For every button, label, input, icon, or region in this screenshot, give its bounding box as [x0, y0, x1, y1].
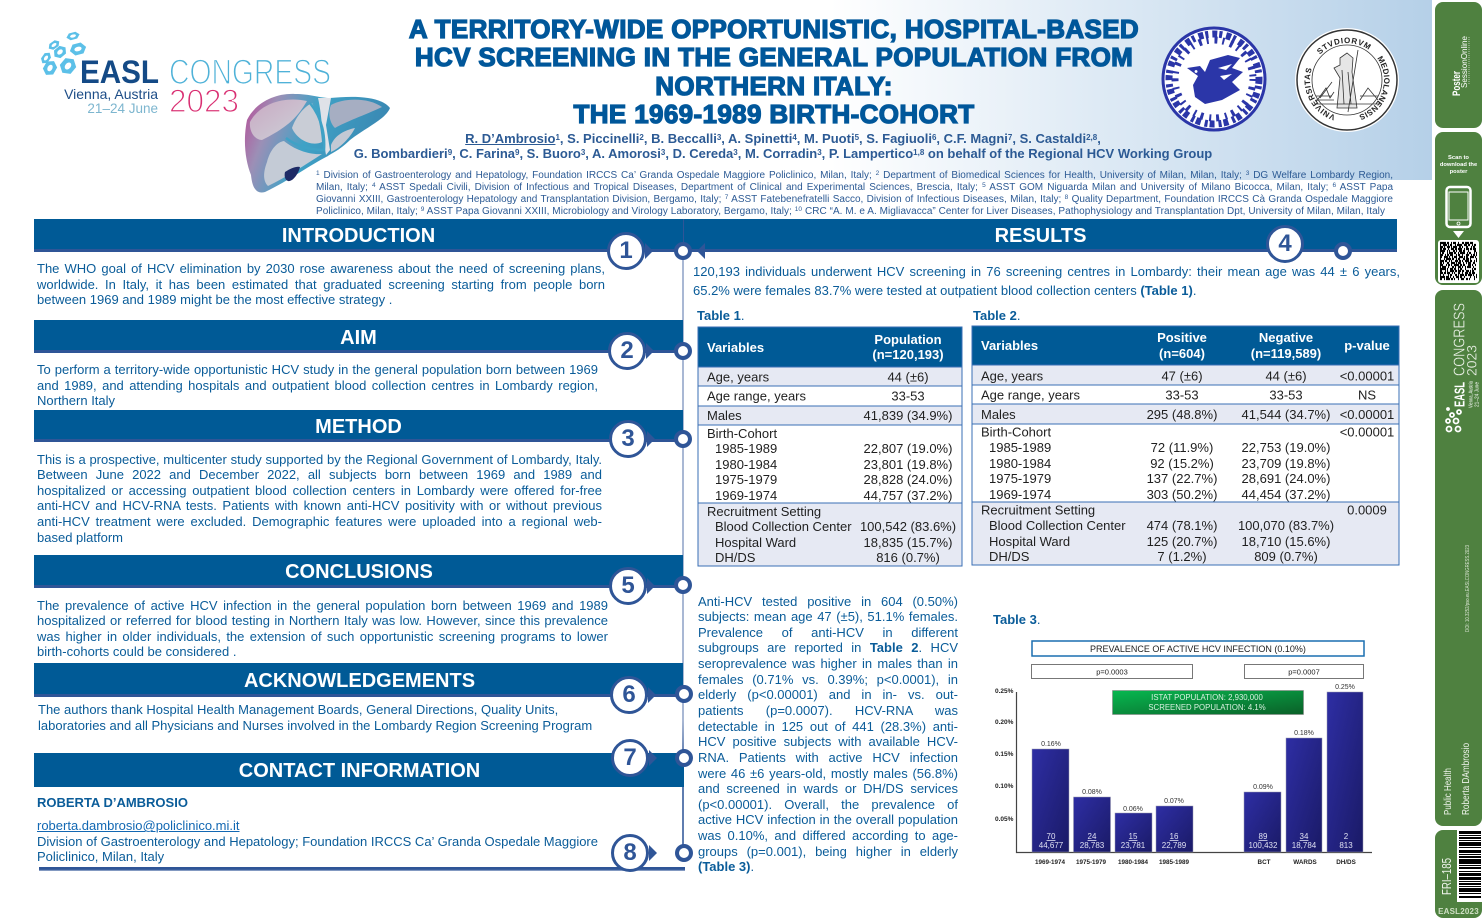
icon: University of Milan seal: VNIVERSITAS: [1304, 68, 1334, 120]
table 1: DH/DS: [715, 550, 756, 565]
heading: introduction: INTRODUCTION: [282, 225, 435, 247]
header gradient band: [0, 0, 1432, 180]
bar value labels: [1041, 684, 1355, 813]
bar value labels: 0.18%: [1294, 730, 1314, 737]
in-bar counts: [1039, 832, 1353, 850]
sidebar panel: QR download: [1435, 132, 1482, 285]
chart title box: [1032, 641, 1364, 656]
text: anti-HCV results: (Table 3).: [698, 859, 754, 874]
barcode: [1457, 830, 1482, 902]
text: method: hospitalized or accessing outpatient blood collection centers in Lombardy were offered for-free: [37, 483, 602, 498]
bar chart: prevalence of active HCV infection: [995, 640, 1372, 866]
callout: screened population: ISTAT POPULATION: 2,930,000: [1151, 693, 1263, 702]
text: introduction: worldwide. In Italy, it has been estimated that graduated screening starting from people born: [37, 277, 605, 292]
affiliations: Giovanni XXIII, Gastroenterology Hepatology and Transplantation Division, Bergamo, Italy; 7 ASST Fatebenefratelli Sacco, Division of Infectious Diseases, Milan, Italy; 8 Quality Department, Foundation IRCCS Cà Granda Ospedale Maggiore: [316, 194, 1393, 205]
category labels: 1980-1984: [1118, 859, 1149, 866]
badge 7: 7: [623, 744, 637, 771]
y axis labels: 0.25%: [995, 688, 1014, 695]
table 2: 22,753 (19.0%): [1242, 440, 1330, 455]
table 3 caption: Table 3.: [993, 612, 1040, 627]
badge 2: 2: [620, 337, 634, 364]
text: anti-HCV results: detectable in 125 out of 441 (28.3%) anti-: [698, 719, 958, 734]
text: anti-HCV results: was 0.10%, and differed according to age-: [698, 828, 958, 843]
heading: method: [34, 410, 683, 442]
poster session wordmark: SessionOnline: [1459, 36, 1469, 88]
badge 1: 1: [619, 237, 633, 264]
badge 6: [610, 676, 648, 714]
category labels: 1975-1979: [1076, 859, 1107, 866]
text: method: based platform: [37, 530, 123, 545]
bar value labels: 0.07%: [1164, 798, 1184, 805]
sidebar congress location: Vienna, Austria: [1468, 380, 1474, 408]
badge 1: [607, 232, 645, 270]
node 6: [675, 685, 693, 703]
text: anti-HCV results: groups (p=0.001), being higher in elderly: [698, 844, 958, 859]
table 1: 816 (0.7%): [876, 550, 940, 565]
in-bar counts: 15: [1129, 832, 1138, 841]
table 2: Males: [981, 407, 1016, 422]
table 2: 809 (0.7%): [1254, 549, 1318, 564]
in-bar counts: 24: [1088, 832, 1097, 841]
topic: Public Health: [1442, 768, 1454, 815]
table 1: 100,542 (83.6%): [860, 519, 956, 534]
arrow: method connector: [647, 431, 655, 447]
in-bar counts: 28,783: [1080, 841, 1105, 850]
text: contact details: Policlinico, Milan, Italy: [37, 849, 164, 864]
heading: introduction: [34, 219, 683, 252]
EASL Congress logo: 21–24 June: [87, 101, 158, 116]
text: method: [37, 452, 602, 545]
table 1: 41,839 (34.9%): [864, 408, 952, 423]
sidebar congress location: 21–24 June: [1474, 382, 1480, 407]
arrow: bottom connector: [649, 845, 657, 861]
table 2: 7 (1.2%): [1157, 549, 1207, 564]
poster session wordmark: [1451, 36, 1469, 96]
badge 3: 3: [621, 425, 635, 452]
table 2: 1969-1974: [989, 487, 1051, 502]
event tag: EASL2023: [1438, 907, 1479, 916]
scan caption: [1440, 155, 1477, 175]
node results: [1334, 242, 1352, 260]
text: anti-HCV results: [698, 594, 958, 874]
table 1: 23,801 (19.8%): [864, 457, 952, 472]
table 2: 137 (22.7%): [1147, 471, 1217, 486]
table 2: 18,710 (15.6%): [1242, 534, 1330, 549]
table 2: NS: [1358, 388, 1376, 402]
table 2: Blood Collection Center: [989, 518, 1126, 533]
table 1: Age, years: [707, 370, 770, 384]
affiliations: 1 Division of Gastroenterology and Hepatology, Foundation IRCCS Ca’ Granda Ospedale Maggiore Policlinico, Milan, Italy; 2 Department of Biomedical Sciences for Health, University of Milan, Milan, Italy; 3 DG Welfare Lombardy Region,: [316, 170, 1393, 181]
heading: contact information: [34, 753, 684, 787]
sidebar panel: congress and poster details: [1435, 290, 1482, 826]
EASL Congress logo: Vienna, Austria: [64, 86, 158, 102]
affiliations: [316, 170, 1394, 217]
icon: university hospital seal: [1162, 26, 1266, 132]
text: introduction: [37, 261, 605, 307]
heading: method: METHOD: [315, 416, 402, 438]
table 1: Blood Collection Center: [715, 519, 852, 534]
category labels: BCT: [1258, 859, 1271, 866]
poster session wordmark: Poster: [1451, 70, 1463, 96]
table 2: 0.0009: [1347, 502, 1387, 518]
text: contact details: ROBERTA D’AMBROSIO: [37, 795, 188, 810]
heading: aim: AIM: [340, 327, 377, 349]
vertical timeline line: [682, 251, 684, 853]
category labels: WARDS: [1293, 859, 1317, 866]
table 1: 22,807 (19.0%): [864, 441, 952, 456]
table 2: <0.00001: [1340, 424, 1394, 440]
in-bar counts: 34: [1300, 832, 1309, 841]
EASL Congress logo: [41, 32, 331, 119]
text: anti-HCV results: HCV positive subjects with available HCV-: [698, 734, 958, 749]
title: A TERRITORY-WIDE OPPORTUNISTIC, HOSPITAL-BASED: [409, 14, 1139, 44]
text: method: anti-HCV and HCV-RNA tests. Patients with known anti-HCV positivity with or without previous: [37, 498, 602, 513]
table 2: DH/DS: [989, 549, 1030, 564]
table 2: 33-53: [1269, 388, 1303, 402]
table 2: 1985-1989: [989, 440, 1051, 455]
text: anti-HCV results: Prevalence of anti-HCV in different: [698, 625, 958, 640]
table 1: 33-53: [891, 388, 925, 404]
text: conclusions: hospitalized or referred for blood testing in Northern Italy was low. However, since this prevalence: [37, 613, 608, 628]
icon: hexagon cluster: [39, 31, 88, 78]
sidebar EASL wordmark: EASL: [1452, 382, 1468, 407]
text: conclusions: was higher in older individuals, the extension of such opportunistic screening programs to lower: [37, 629, 608, 644]
icon: sidebar hexagons: [1446, 408, 1461, 432]
p-value box: settings: p=0.0007: [1288, 668, 1320, 676]
badge 5: [609, 567, 647, 605]
icon: phone: [1445, 186, 1472, 238]
affiliations: Policlinico, Milan, Italy; 9 ASST Papa Giovanni XXIII, Microbiology and Virology Laboratory, Bergamo, Italy; 10 CRC “A. M. e A. Migliavacca” Center for Liver Diseases, Pathophysiology and Transplantation Dpt, University of Milan, Milan, Italy: [316, 206, 1385, 217]
table 2: 41,544 (34.7%): [1242, 407, 1330, 422]
text: anti-HCV results: RNA. Patients with active HCV infection: [698, 750, 958, 765]
table 1: 1969-1974: [715, 488, 777, 503]
table 2: Variables: [981, 338, 1038, 353]
table 2: 125 (20.7%): [1147, 534, 1217, 549]
text: results summary: [693, 264, 1400, 298]
table 2: 474 (78.1%): [1147, 518, 1217, 533]
arrow: aim connector: [646, 343, 653, 359]
callout: screened population: [1112, 690, 1304, 714]
table 1: 44,757 (37.2%): [864, 488, 952, 503]
heading: conclusions: [34, 555, 683, 588]
heading: aim: [34, 320, 683, 353]
affiliations: Milan, Italy; 4 ASST Spedali Civili, Division of Infectious and Tropical Diseases, Department of Clinical and Experimental Sciences, Brescia, Italy; 5 ASST GOM Niguarda Milan and University of Milano Bicocca, Milan, Italy; 6 ASST Papa: [316, 182, 1393, 193]
text: anti-HCV results: elderly (p<0.00001) and in in- vs. out-: [698, 687, 958, 702]
arrow connectors: [645, 243, 705, 259]
badge 4: [1266, 225, 1304, 263]
table 2: 47 (±6): [1161, 368, 1203, 384]
bar value labels: 0.25%: [1335, 684, 1355, 691]
logo wordmark: EASL: [80, 54, 159, 90]
node 1: [674, 242, 692, 260]
sidebar congress year: 2023: [1464, 345, 1480, 376]
author name: Roberta DAmbrosio: [1460, 743, 1472, 815]
in-bar counts: 2: [1344, 832, 1349, 841]
bar value labels: 0.16%: [1041, 741, 1061, 748]
table 2: Positive: [1157, 330, 1207, 345]
table 2: Age, years: [981, 368, 1044, 384]
table 1: 18,835 (15.7%): [864, 535, 952, 550]
arrow: acknowledgements connector: [648, 687, 655, 703]
heading: acknowledgements: ACKNOWLEDGEMENTS: [244, 670, 475, 692]
in-bar counts: 16: [1170, 832, 1179, 841]
table 1: Males: [707, 408, 742, 423]
table 2: Birth-Cohort: [981, 424, 1051, 440]
y axis labels: [995, 688, 1014, 823]
text: aim: and 1989, and attending hospitals and outpatient blood collection centres in Lombardy region,: [37, 378, 598, 393]
text: method: This is a prospective, multicenter study supported by the Regional Government of Lombardy, Italy.: [37, 452, 602, 466]
arrow: conclusions connector: [647, 578, 654, 594]
authors: [354, 131, 1212, 161]
bars: [1032, 692, 1363, 852]
icon: University of Milan seal: [1295, 28, 1399, 132]
text: anti-HCV results: patients (p=0.0007). HCV-RNA was: [698, 703, 958, 718]
badge 3: [609, 420, 647, 458]
category labels: [1035, 859, 1356, 866]
text: anti-HCV results: were 46 ±6 years-old, mostly males (56.8%): [698, 766, 958, 781]
text: conclusions: [37, 598, 608, 659]
table 2: Recruitment Setting: [981, 502, 1095, 518]
table 2: 44,454 (37.2%): [1242, 487, 1330, 502]
text: contact details: [37, 795, 598, 864]
table 2: 23,709 (19.8%): [1242, 456, 1330, 471]
sidebar congress location: [1468, 380, 1480, 408]
chart title box: PREVALENCE OF ACTIVE HCV INFECTION (0.10%): [1090, 644, 1306, 654]
node 7: [675, 749, 693, 767]
node 3: [674, 430, 692, 448]
title: HCV SCREENING IN THE GENERAL POPULATION FROM: [415, 42, 1133, 72]
text: method: anti-HCV treatment were excluded. Demographic features were uploaded into a regional web-: [37, 514, 602, 529]
scan caption: Scan to: [1448, 155, 1469, 161]
p-value box: birth cohorts: [1032, 664, 1192, 678]
bottom rule: [39, 867, 685, 871]
table 2: 92 (15.2%): [1150, 456, 1214, 471]
category labels: DH/DS: [1336, 859, 1356, 866]
EASL Congress logo: 2023: [169, 83, 239, 119]
DOI: DOI: 10.3252/pso.eu.EASLCONGRESS.2023: [1465, 545, 1471, 632]
text: anti-HCV results: Anti-HCV tested positive in 604 (0.50%): [698, 594, 958, 608]
category labels: 1969-1974: [1035, 859, 1066, 866]
text: acknowledgements: [38, 702, 592, 733]
in-bar counts: 70: [1047, 832, 1056, 841]
table 1: Age range, years: [707, 388, 807, 404]
table 1: Variables: [707, 340, 764, 355]
y axis labels: 0.15%: [995, 751, 1014, 758]
table 2: 303 (50.2%): [1147, 487, 1217, 502]
heading: results: RESULTS: [995, 225, 1086, 247]
title: [408, 14, 1139, 129]
scan caption: download the: [1440, 162, 1477, 168]
table 1: Birth-Cohort: [707, 426, 777, 441]
in-bar counts: 23,781: [1121, 841, 1146, 850]
text: method: Between June 2022 and December 2022, all subjects born between 1969 and 1989 and: [37, 467, 602, 482]
text: anti-HCV results: subgroups are reported in Table 2. HCV: [698, 640, 958, 655]
title: THE 1969-1989 BIRTH-COHORT: [574, 99, 974, 129]
heading: contact information: CONTACT INFORMATION: [239, 760, 480, 782]
sidebar panel: poster session online: [1435, 2, 1482, 128]
in-bar counts: 44,677: [1039, 841, 1064, 850]
y axis labels: 0.10%: [995, 783, 1014, 790]
authors: G. Bombardieri9, C. Farina9, S. Buoro3, A. Amorosi3, D. Cereda3, M. Corradin3, P. Lampertico1,8 on behalf of the Regional HCV Working Group: [354, 146, 1212, 161]
text: aim: Northern Italy: [37, 393, 115, 408]
text: introduction: between 1969 and 1989 might be the most effective strategy .: [37, 292, 392, 307]
table 1: Hospital Ward: [715, 535, 796, 550]
chart axes: [1016, 692, 1372, 852]
table 1: 1985-1989: [715, 441, 777, 456]
table 2: 72 (11.9%): [1151, 440, 1213, 455]
text: aim: [37, 362, 598, 408]
table 1: 28,828 (24.0%): [864, 472, 952, 487]
table 2: 1980-1984: [989, 456, 1051, 471]
icon: liver illustration: [244, 94, 390, 192]
bar value labels: 0.08%: [1082, 789, 1102, 796]
table 1: 1975-1979: [715, 472, 777, 487]
p-value box: birth cohorts: p=0.0003: [1096, 668, 1128, 676]
badge 7: [611, 739, 649, 777]
category labels: 1985-1989: [1159, 859, 1190, 866]
bar value labels: 0.09%: [1253, 784, 1273, 791]
badge 8: 8: [623, 839, 637, 866]
table 2: p-value: [1344, 338, 1390, 353]
table 1: 44 (±6): [887, 370, 929, 384]
p-value box: settings: [1244, 664, 1364, 678]
icon: University of Milan seal: STVDIORVM: [1317, 38, 1371, 54]
text: anti-HCV results: subjects: mean age 47 (±5), 51.1% females.: [698, 609, 958, 624]
table 2: Hospital Ward: [989, 534, 1070, 549]
node 2: [674, 342, 692, 360]
table 1: Recruitment Setting: [707, 504, 821, 519]
table 2: 33-53: [1165, 388, 1199, 402]
table 2: 295 (48.8%): [1147, 407, 1217, 422]
text: acknowledgements: laboratories and all Physicians and Nurses involved in the Lombardy Region Screening Program: [38, 718, 592, 733]
text: conclusions: The prevalence of active HCV infection in the general population born between 1969 and 1989: [37, 598, 608, 612]
in-bar counts: 89: [1259, 832, 1268, 841]
text: anti-HCV results: seroprevalence was higher in males than in: [698, 656, 958, 671]
node 8: [675, 844, 693, 862]
arrow: contact connector: [649, 750, 657, 766]
text: anti-HCV results: and screened in wards or DH/DS services: [698, 781, 958, 796]
table 2: [972, 326, 1400, 566]
text: introduction: The WHO goal of HCV elimination by 2030 rose awareness about the need of screening plans,: [37, 261, 605, 276]
badge 6: 6: [622, 681, 636, 708]
table 1 caption: Table 1.: [697, 308, 744, 323]
table 2: 28,691 (24.0%): [1242, 471, 1330, 486]
heading: acknowledgements: [34, 663, 683, 697]
icon: University of Milan seal: MEDIOLANENSIS: [1360, 56, 1390, 120]
sidebar panel: poster number and barcode: [1435, 830, 1482, 918]
table 2: (n=119,589): [1251, 346, 1321, 361]
badge 4: 4: [1278, 230, 1292, 257]
in-bar counts: 22,789: [1162, 841, 1187, 850]
poster number: FRI–185: [1440, 858, 1454, 895]
table 2: Negative: [1259, 330, 1313, 345]
badge 5: 5: [621, 572, 635, 599]
table 2: Age range, years: [981, 388, 1081, 402]
text: contact details: roberta.dambrosio@policlinico.mi.it: [37, 818, 240, 833]
text: conclusions: birth-cohorts could be considered .: [37, 644, 236, 659]
node 5: [674, 576, 692, 594]
text: acknowledgements: The authors thank Hospital Health Management Boards, General Directions, Quality Units,: [38, 702, 558, 717]
text: anti-HCV results: females (0.71% vs. 0.39%; p<0.0001), in: [698, 672, 958, 687]
table 1: 1980-1984: [715, 457, 777, 472]
text: results summary: 65.2% were females 83.7% were tested at outpatient blood collection centers (Table 1).: [693, 283, 1196, 298]
heading: results: [683, 219, 1397, 252]
QR code: [1438, 240, 1479, 283]
title: NORTHERN ITALY:: [655, 71, 893, 101]
table 2: <0.00001: [1340, 368, 1394, 384]
table 1: [698, 326, 962, 566]
authors: R. D’Ambrosio1, S. Piccinelli2, B. Beccalli3, A. Spinetti4, M. Puoti5, S. Fagiuoli6, C.F. Magni7, S. Castaldi2,8,: [465, 131, 1101, 146]
in-bar counts: 18,784: [1292, 841, 1317, 850]
text: anti-HCV results: (p<0.00001). Overall, the prevalence of: [698, 797, 958, 812]
badge 8: [611, 834, 649, 872]
table 2: <0.00001: [1340, 407, 1394, 422]
bar value labels: 0.06%: [1123, 806, 1143, 813]
table 1: (n=120,193): [872, 347, 944, 362]
text: aim: To perform a territory-wide opportunistic HCV study in the general population born between 1969: [37, 362, 598, 377]
y axis labels: 0.05%: [995, 816, 1014, 823]
table 2: 100,070 (83.7%): [1238, 518, 1334, 533]
callout: screened population: SCREENED POPULATION: 4.1%: [1148, 703, 1266, 712]
heading: conclusions: CONCLUSIONS: [285, 561, 433, 583]
in-bar counts: 100,432: [1249, 841, 1278, 850]
text: anti-HCV results: active HCV infection in the overall population: [698, 812, 958, 827]
badge 2: [608, 332, 646, 370]
scan caption: poster: [1450, 169, 1467, 175]
table 2 caption: Table 2.: [973, 308, 1020, 323]
table 1: Population: [874, 332, 942, 347]
table 2: 44 (±6): [1265, 368, 1307, 384]
text: contact details: Division of Gastroenterology and Hepatology; Foundation IRCCS Ca’ Granda Ospedale Maggiore: [37, 834, 598, 849]
text: results summary: 120,193 individuals underwent HCV screening in 76 screening centres in Lombardy: their mean age was 44 ± 6 years,: [693, 264, 1400, 279]
table 2: 1975-1979: [989, 471, 1051, 486]
in-bar counts: 813: [1339, 841, 1353, 850]
y axis labels: 0.20%: [995, 719, 1014, 726]
table 2: (n=604): [1159, 346, 1205, 361]
